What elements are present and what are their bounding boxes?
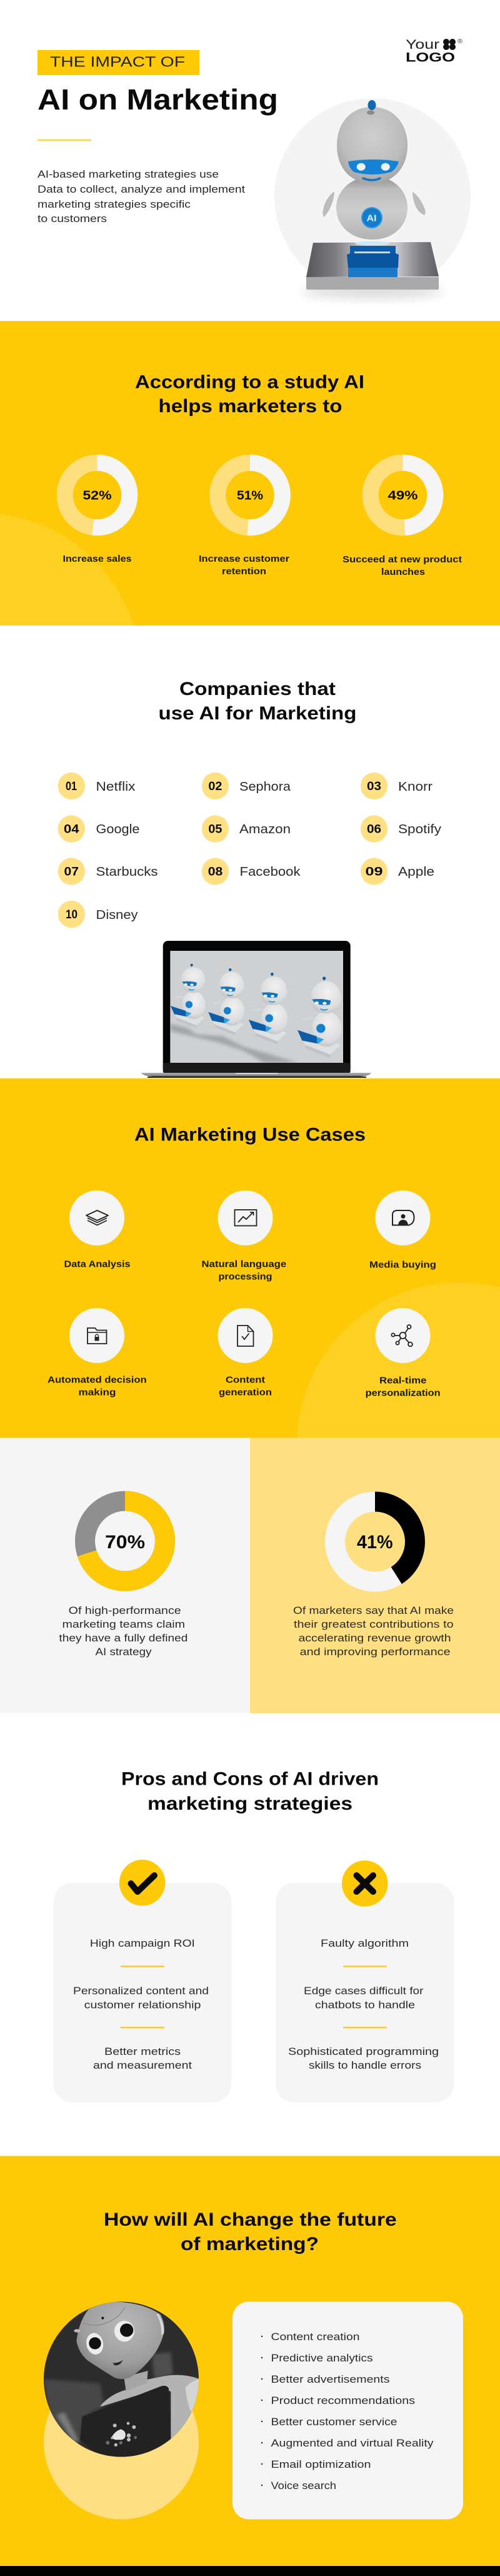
- icon: document check: [238, 1326, 254, 1346]
- donut chart: 41%: 41%: [357, 1532, 392, 1553]
- card: future list: Augmented and virtual Reality: [271, 2437, 434, 2449]
- logo: [406, 38, 463, 65]
- company 07: [58, 858, 158, 885]
- use case: real-time personalization: personalization: [366, 1387, 441, 1399]
- company 03: 03: [367, 780, 381, 793]
- card: future list: Email optimization: [271, 2458, 371, 2470]
- logo: ®: [458, 38, 463, 45]
- icon: network: [391, 1325, 412, 1346]
- illustration: laptop with robots: [141, 941, 371, 1078]
- footer bar: [0, 2566, 500, 2576]
- use case: automated decision making: Automated decision: [48, 1375, 147, 1385]
- title: AI on Marketing: [38, 83, 278, 116]
- use case: media buying: Media buying: [369, 1260, 436, 1270]
- intro text block: to customers: [38, 213, 107, 225]
- illustration: robot on laptop: [274, 98, 471, 299]
- heading: of marketing?: [181, 2234, 319, 2254]
- company 08: 08: [208, 866, 222, 878]
- card: cons: chatbots to handle: [315, 1999, 415, 2011]
- heading: AI Marketing Use Cases: [134, 1125, 366, 1145]
- panel: companies that use AI: [58, 679, 441, 1078]
- icon: chart: [235, 1210, 256, 1226]
- panel: pros and cons: [54, 1769, 454, 2102]
- company 02: 02: [208, 780, 222, 793]
- company 07: Starbucks: [96, 865, 158, 879]
- icon: check mark: [119, 1860, 165, 1905]
- intro text block: [38, 168, 245, 225]
- company 10: 10: [66, 908, 78, 921]
- label: succeed at new product launches: [342, 554, 462, 577]
- logo: LOGO: [406, 50, 455, 65]
- heading: [135, 372, 364, 417]
- company 03: [361, 773, 432, 799]
- text block: [293, 1605, 454, 1658]
- decorative backing circle: [44, 2364, 199, 2519]
- panel: 70% of high-performance teams: [0, 1438, 250, 1713]
- panel: AI marketing use cases: [0, 1078, 500, 1438]
- donut chart: 49%: 49%: [388, 489, 418, 503]
- use case: content generation: [218, 1308, 272, 1397]
- company 10: [58, 901, 138, 928]
- text block: Of high-performance: [69, 1605, 181, 1616]
- company 05: 05: [208, 823, 222, 836]
- label: increase customer retention: [199, 554, 289, 577]
- use case: natural language processing: Natural language: [201, 1259, 286, 1270]
- heading: [121, 1769, 379, 1814]
- panel: future of marketing: [0, 2156, 500, 2566]
- use case: data analysis: Data Analysis: [64, 1259, 130, 1270]
- label: increase customer retention: retention: [222, 566, 266, 577]
- company 04: 04: [64, 823, 79, 836]
- company 10: Disney: [96, 908, 138, 922]
- company 02: [202, 773, 291, 799]
- text block: and improving performance: [300, 1646, 451, 1658]
- card: future list: Voice search: [271, 2480, 336, 2492]
- card: pros: Personalized content and: [73, 1985, 209, 1997]
- label: succeed at new product launches: Succeed at new product: [342, 554, 462, 565]
- use case: data analysis: [64, 1190, 130, 1270]
- text block: marketing teams claim: [62, 1618, 185, 1630]
- heading: helps marketers to: [159, 396, 342, 417]
- intro text block: marketing strategies specific: [38, 198, 191, 210]
- card: cons: Edge cases difficult for: [304, 1985, 424, 1997]
- company 07: 07: [64, 866, 79, 878]
- text block: accelerating revenue growth: [299, 1632, 451, 1644]
- company 08: Facebook: [240, 865, 301, 879]
- company 09: 09: [365, 866, 382, 878]
- use case: media buying: [369, 1190, 436, 1270]
- heading: use AI for Marketing: [159, 703, 356, 724]
- company 06: 06: [367, 823, 381, 836]
- company 05: [202, 815, 291, 843]
- card: future list: Predictive analytics: [271, 2352, 372, 2364]
- company 06: [361, 815, 441, 843]
- icon: layers: [86, 1210, 108, 1225]
- card: pros: customer relationship: [84, 1999, 201, 2011]
- card: future list: [232, 2301, 463, 2519]
- donut chart: 51%: 51%: [237, 489, 263, 503]
- company 01: 01: [66, 780, 77, 793]
- heading: [159, 679, 356, 724]
- heading: Pros and Cons of AI driven: [121, 1769, 379, 1789]
- heading label: the impact of: [38, 50, 199, 75]
- use case: automated decision making: [48, 1308, 147, 1397]
- company 01: [58, 773, 135, 799]
- card: pros: [54, 1860, 231, 2102]
- company 08: [202, 858, 301, 885]
- use case: automated decision making: making: [79, 1387, 116, 1397]
- text block: they have a fully defined: [59, 1632, 188, 1644]
- heading label: the impact of: THE IMPACT OF: [50, 54, 185, 70]
- donut chart: 49%: [371, 463, 435, 527]
- card: future list: Better advertisements: [271, 2373, 390, 2385]
- intro text block: Data to collect, analyze and implement: [38, 183, 245, 195]
- heading: According to a study AI: [135, 372, 364, 393]
- card: future list: Better customer service: [271, 2416, 398, 2428]
- card: future list: Product recommendations: [271, 2395, 415, 2406]
- card: cons: [276, 1860, 454, 2102]
- donut chart: 70%: [85, 1501, 165, 1581]
- panel: according to a study: [0, 321, 500, 626]
- icon: cross mark: [342, 1860, 388, 1907]
- company 06: Spotify: [398, 823, 441, 836]
- logo: Your: [406, 38, 439, 52]
- card: cons: Sophisticated programming: [288, 2046, 439, 2057]
- icon: media person: [392, 1210, 414, 1225]
- donut chart: 70%: 70%: [105, 1532, 145, 1553]
- card: future list: Content creation: [271, 2331, 360, 2343]
- use case: natural language processing: processing: [219, 1271, 272, 1282]
- donut chart: 41%: [335, 1501, 415, 1581]
- card: pros: and measurement: [93, 2059, 192, 2071]
- company 03: Knorr: [398, 780, 432, 794]
- text block: [59, 1605, 188, 1658]
- company 02: Sephora: [239, 780, 291, 794]
- label: increase sales: Increase sales: [62, 554, 131, 564]
- label: succeed at new product launches: launches: [381, 567, 425, 577]
- illustration: robot on laptop: AI: [366, 213, 376, 224]
- text block: their greatest contributions to: [294, 1618, 454, 1630]
- icon: locked folder: [88, 1328, 106, 1344]
- company 04: [58, 815, 140, 843]
- company 09: Apple: [398, 865, 434, 879]
- company 01: Netflix: [96, 780, 135, 794]
- card: cons: skills to handle errors: [309, 2059, 421, 2071]
- use case: content generation: Content: [226, 1375, 265, 1385]
- use case: natural language processing: [201, 1190, 286, 1282]
- heading: Companies that: [179, 679, 336, 699]
- card: pros: Better metrics: [104, 2046, 181, 2057]
- label: increase customer retention: Increase customer: [199, 554, 289, 564]
- intro text block: AI-based marketing strategies use: [38, 168, 219, 180]
- use case: content generation: generation: [219, 1387, 272, 1397]
- donut chart: 52%: 52%: [82, 489, 112, 503]
- donut chart: 51%: [218, 463, 282, 527]
- text block: Of marketers say that AI make: [293, 1605, 454, 1616]
- panel: hero header: [38, 38, 471, 299]
- company 09: [361, 858, 434, 885]
- photo: robot with tablet: [42, 2300, 202, 2458]
- use case: real-time personalization: [366, 1308, 441, 1399]
- text block: AI strategy: [95, 1646, 152, 1658]
- donut chart: 52%: [65, 463, 129, 527]
- card: pros: High campaign ROI: [90, 1937, 195, 1949]
- heading: How will AI change the future: [104, 2209, 397, 2230]
- heading: [104, 2209, 397, 2254]
- company 05: Amazon: [239, 823, 291, 836]
- company 04: Google: [96, 823, 140, 836]
- use case: real-time personalization: Real-time: [379, 1375, 426, 1386]
- panel: 41% of marketers: [250, 1438, 500, 1713]
- heading: marketing strategies: [148, 1793, 352, 1814]
- card: cons: Faulty algorithm: [321, 1937, 409, 1949]
